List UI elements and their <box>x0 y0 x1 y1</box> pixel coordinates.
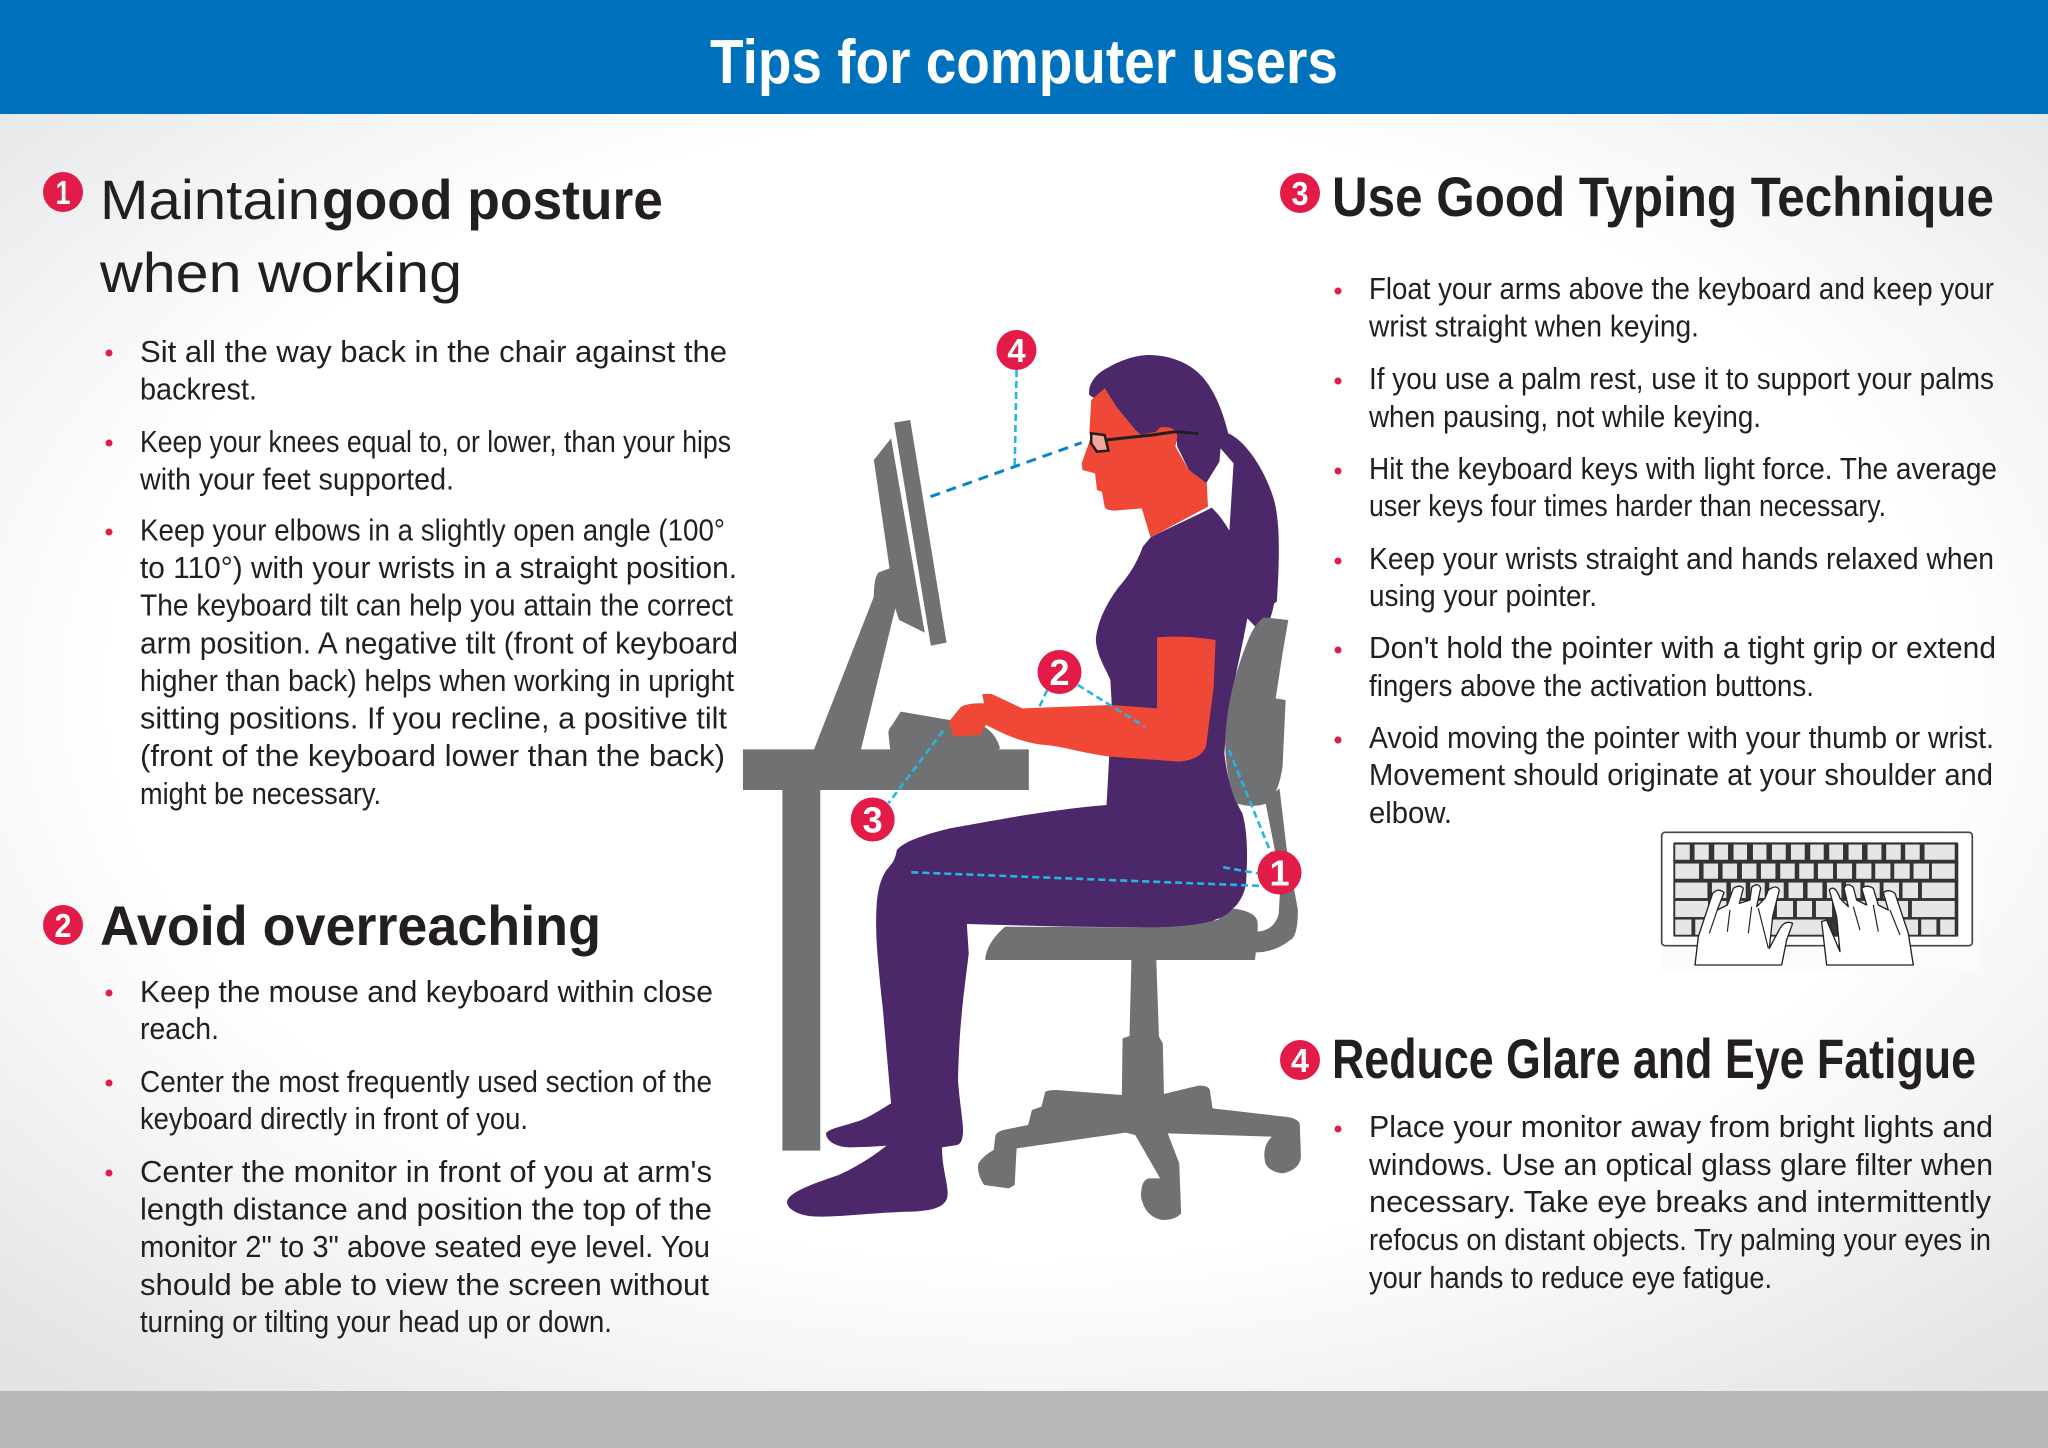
list: typing tips <box>1334 272 1997 830</box>
list: typing tips: Avoid moving the pointer with your thumb or wrist. <box>1369 721 1994 755</box>
list: reach tips: reach. <box>140 1012 219 1046</box>
list: typing tips: elbow. <box>1369 796 1452 830</box>
marker 1: 1 <box>1269 852 1290 894</box>
list: typing tips: Hit the keyboard keys with light force. The average <box>1369 452 1997 486</box>
panel: 3 use good typing technique <box>1280 165 1997 970</box>
list: glare tips: your hands to reduce eye fatigue. <box>1369 1261 1772 1295</box>
number badge 1 <box>43 172 83 212</box>
panel: 1 maintain good posture <box>43 168 738 811</box>
guide lines <box>888 370 1271 886</box>
list: posture tips: backrest. <box>140 372 257 406</box>
monitor <box>814 420 947 750</box>
list: glare tips <box>1334 1110 1993 1295</box>
body: clothes and hair <box>787 355 1279 1217</box>
number badge 1: 1 <box>56 174 70 211</box>
list: glare tips: refocus on distant objects. Try palming your eyes in <box>1369 1223 1991 1257</box>
list: typing tips: when pausing, not while keying. <box>1368 400 1761 434</box>
list: posture tips: higher than back) helps when working in upright <box>140 664 734 698</box>
list: posture tips: Keep your knees equal to, or lower, than your hips <box>140 425 731 459</box>
list: glare tips: windows. Use an optical glass glare filter when <box>1368 1148 1993 1182</box>
glasses <box>1091 432 1198 452</box>
marker 3 <box>851 798 895 842</box>
marker 4: 4 <box>1007 332 1026 369</box>
list: posture tips: (front of the keyboard lower than the back) <box>140 739 725 773</box>
list: glare tips: necessary. Take eye breaks and intermittently <box>1369 1185 1992 1219</box>
list: posture tips: with your feet supported. <box>139 462 454 496</box>
marker 3: 3 <box>863 800 883 840</box>
list: posture tips: might be necessary. <box>140 777 381 811</box>
list: posture tips <box>106 335 738 811</box>
number badge 4: 4 <box>1291 1042 1310 1079</box>
heading: maintain good posture: Maintain <box>100 168 320 231</box>
title: Tips for computer users <box>710 28 1338 97</box>
heading: maintain good posture <box>99 168 663 304</box>
marker 1 <box>1258 850 1302 894</box>
heading: avoid overreaching: Avoid overreaching <box>100 894 601 957</box>
header band <box>0 0 2048 114</box>
desk <box>743 749 1029 1151</box>
number badge 2 <box>43 905 83 945</box>
list: reach tips: Center the monitor in front of you at arm's <box>140 1155 712 1189</box>
list: reach tips: monitor 2" to 3" above seated eye level. You <box>140 1230 710 1264</box>
head and neck skin <box>1082 388 1208 537</box>
panel: 2 avoid overreaching <box>43 894 713 1339</box>
list: posture tips: The keyboard tilt can help you attain the correct <box>140 589 733 623</box>
list: reach tips <box>106 975 713 1339</box>
marker 4 <box>996 330 1036 370</box>
panel: 4 reduce glare and eye fatigue <box>1280 1027 1993 1295</box>
list: typing tips: user keys four times harder than necessary. <box>1369 489 1886 523</box>
heading: maintain good posture: when working <box>99 241 462 304</box>
list: posture tips: Keep your elbows in a slightly open angle (100° <box>140 514 725 548</box>
illustration: seated worker at desk <box>743 330 1302 1220</box>
list: posture tips: arm position. A negative tilt (front of keyboard <box>140 626 738 660</box>
list: posture tips: Sit all the way back in the chair against the <box>140 335 727 369</box>
list: typing tips: Don't hold the pointer with a tight grip or extend <box>1369 631 1996 665</box>
list: reach tips: Center the most frequently used section of the <box>140 1065 712 1099</box>
marker 2: 2 <box>1049 652 1070 693</box>
arm and hand skin <box>949 637 1216 762</box>
list: reach tips: length distance and position the top of the <box>140 1192 712 1226</box>
number badge 4 <box>1280 1040 1320 1080</box>
icon: hands on keyboard <box>1662 828 1980 970</box>
number badge 2: 2 <box>54 907 72 944</box>
number badge 3: 3 <box>1292 175 1308 212</box>
list: typing tips: If you use a palm rest, use it to support your palms <box>1369 362 1994 396</box>
list: reach tips: keyboard directly in front of you. <box>140 1102 528 1136</box>
list: typing tips: fingers above the activation buttons. <box>1369 669 1814 703</box>
list: typing tips: Movement should originate at your shoulder and <box>1369 758 1993 792</box>
list: typing tips: wrist straight when keying. <box>1368 310 1699 344</box>
heading: maintain good posture: good posture <box>322 168 663 231</box>
footer band <box>0 1391 2048 1448</box>
list: posture tips: sitting positions. If you recline, a positive tilt <box>140 702 728 736</box>
list: glare tips: Place your monitor away from bright lights and <box>1369 1110 1993 1144</box>
number badge 3 <box>1280 173 1320 213</box>
list: typing tips: using your pointer. <box>1369 579 1597 613</box>
list: posture tips: to 110°) with your wrists in a straight position. <box>140 551 737 585</box>
keyboard on desk <box>888 712 1000 751</box>
list: reach tips: turning or tilting your head up or down. <box>140 1305 612 1339</box>
list: typing tips: Keep your wrists straight and hands relaxed when <box>1369 542 1994 576</box>
list: reach tips: Keep the mouse and keyboard within close <box>140 975 713 1009</box>
marker 2 <box>1038 650 1082 694</box>
chair backrest <box>1225 617 1288 806</box>
list: typing tips: Float your arms above the keyboard and keep your <box>1369 272 1994 306</box>
office chair base and seat <box>978 788 1301 1220</box>
list: reach tips: should be able to view the screen without <box>140 1268 710 1302</box>
